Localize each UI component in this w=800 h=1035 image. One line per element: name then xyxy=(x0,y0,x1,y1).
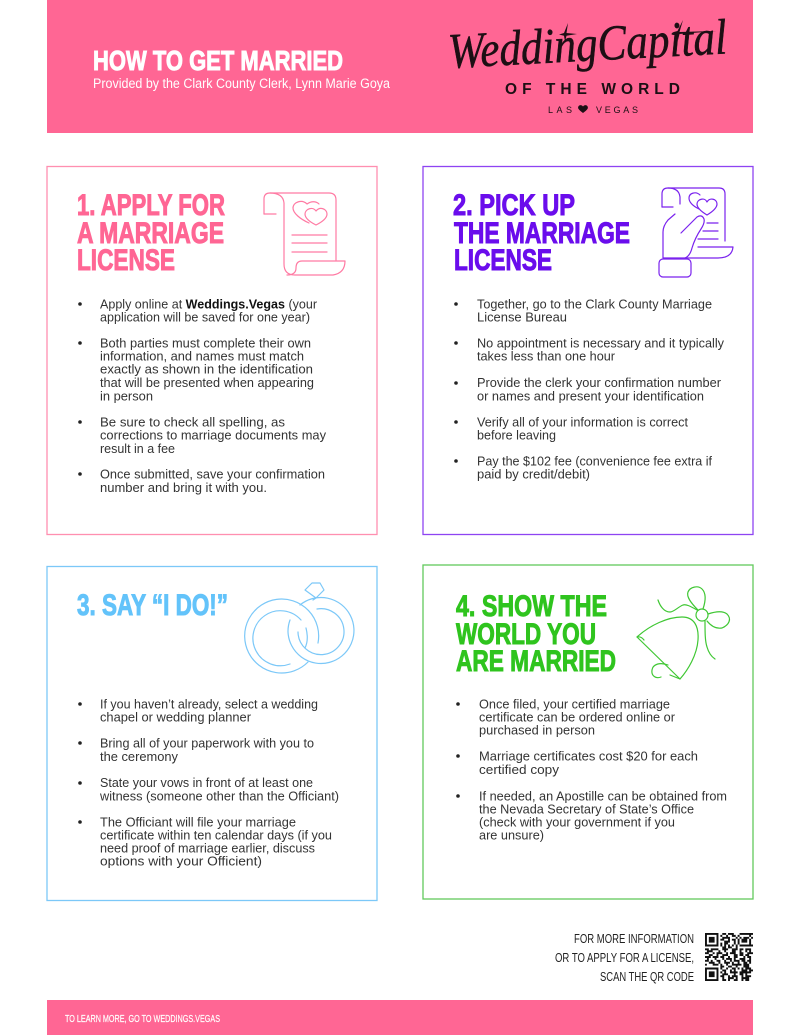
bullet list 4: Once filed, your certified marriage xyxy=(479,696,670,712)
heading 4: ARE MARRIED xyxy=(456,645,616,678)
bullet list 1: that will be presented when appearing xyxy=(100,375,314,390)
bullet list 1: result in a fee xyxy=(100,441,175,456)
bullet list 3: the ceremony xyxy=(100,749,178,764)
bullet list 2: License Bureau xyxy=(477,310,567,324)
bullet list 1: application will be saved for one year) xyxy=(100,310,310,324)
bullet list 1: Once submitted, save your confirmation xyxy=(100,466,325,482)
bullet list 3: options with your Officient) xyxy=(100,854,262,868)
header banner xyxy=(47,0,753,133)
bullet list 2: No appointment is necessary and it typically xyxy=(477,336,724,350)
bullet list 4: are unsure) xyxy=(479,828,544,842)
icon: scroll with hearts xyxy=(264,193,345,275)
heading 1: LICENSE xyxy=(77,244,175,277)
bullet list 1: in person xyxy=(100,388,153,404)
QR call to action text: SCAN THE QR CODE xyxy=(600,969,694,984)
logo: Wedding Capital of the World: WeddingCapital xyxy=(447,8,728,79)
bullet list 2: Pay the $102 fee (convenience fee extra if xyxy=(477,454,712,468)
QR code xyxy=(705,934,753,980)
QR call to action text: OR TO APPLY FOR A LICENSE, xyxy=(555,950,694,965)
bullet list 3: witness (someone other than the Officiant) xyxy=(99,788,339,804)
panel 2: pick up the marriage license xyxy=(423,166,753,534)
bullet list 3: State your vows in front of at least one xyxy=(100,775,313,790)
bullet list 3: Bring all of your paperwork with you to xyxy=(100,736,314,750)
bullet list 4: (check with your government if you xyxy=(479,814,675,830)
heading 4: WORLD YOU xyxy=(456,618,596,651)
logo: Wedding Capital of the World: LAS xyxy=(548,105,572,115)
icon: interlocked rings xyxy=(245,583,354,673)
bullet list 1: information, and names must match xyxy=(100,348,304,364)
bullet list 2: before leaving xyxy=(477,428,556,442)
icon: hand holding license xyxy=(659,188,733,277)
title: HOW TO GET MARRIED xyxy=(93,45,343,76)
heading 1: 1. APPLY FOR xyxy=(77,189,225,222)
heading 1 xyxy=(77,189,225,277)
panel 4: show the world you are married xyxy=(423,565,753,899)
bullet list 2: Together, go to the Clark County Marriage xyxy=(477,296,712,312)
bullet list 4: Marriage certificates cost $20 for each xyxy=(479,748,698,764)
bullet list 1 xyxy=(78,296,326,495)
logo: Wedding Capital of the World xyxy=(447,8,728,115)
heading 2: THE MARRIAGE xyxy=(454,217,630,250)
subtitle: Provided by the Clark County Clerk, Lynn Marie Goya xyxy=(93,76,390,91)
heading 4: 4. SHOW THE xyxy=(456,590,607,623)
heading 2 xyxy=(453,189,630,277)
panel 3: say I do xyxy=(47,566,377,900)
bullet list 3: The Officiant will file your marriage xyxy=(100,814,296,830)
panel 1: apply for a marriage license xyxy=(47,166,377,534)
heading 1: A MARRIAGE xyxy=(77,217,224,250)
QR call to action text: FOR MORE INFORMATION xyxy=(574,931,694,946)
bullet list 4: purchased in person xyxy=(479,722,595,738)
bullet list 1: exactly as shown in the identification xyxy=(100,362,313,376)
footer text: TO LEARN MORE, GO TO WEDDINGS.VEGAS xyxy=(65,1013,220,1025)
heading 2: 2. PICK UP xyxy=(453,189,575,222)
bullet list 2: paid by credit/debit) xyxy=(477,466,590,482)
heading 4 xyxy=(456,590,616,678)
bullet list 1: number and bring it with you. xyxy=(100,480,267,495)
bullet list 1: Apply online at Weddings.Vegas (your xyxy=(100,296,318,312)
bullet list 1: corrections to marriage documents may xyxy=(100,428,326,442)
bullet list 2: Provide the clerk your confirmation number xyxy=(477,375,722,390)
bullet list 3: chapel or wedding planner xyxy=(100,710,252,724)
logo: Wedding Capital of the World: OF THE WORLD xyxy=(505,81,680,98)
bullet list 3: If you haven’t already, select a wedding xyxy=(100,696,318,712)
footer banner xyxy=(47,1000,753,1035)
heading 2: LICENSE xyxy=(454,244,552,277)
bullet list 4: If needed, an Apostille can be obtained from xyxy=(479,788,727,804)
heading 3: 3. SAY “I DO!” xyxy=(77,589,228,622)
bullet list 3: need proof of marriage earlier, discuss xyxy=(100,840,315,856)
bullet list 1: Both parties must complete their own xyxy=(100,336,311,350)
bullet list 3 xyxy=(78,696,339,868)
bullet list 2: takes less than one hour xyxy=(477,348,616,364)
bullet list 3: certificate within ten calendar days (if you xyxy=(100,828,332,842)
bullet list 2 xyxy=(454,296,724,482)
bullet list 4: certified copy xyxy=(479,762,560,777)
icon: bell with bow xyxy=(637,587,729,679)
bullet list 2: Verify all of your information is correct xyxy=(477,414,688,430)
bullet list 4 xyxy=(456,696,727,842)
bullet list 2: or names and present your identification xyxy=(477,388,704,404)
bullet list 4: certificate can be ordered online or xyxy=(479,710,676,724)
QR call to action text xyxy=(555,931,694,984)
bullet list 1: Be sure to check all spelling, as xyxy=(100,414,285,430)
bullet list 4: the Nevada Secretary of State’s Office xyxy=(479,802,694,816)
logo: Wedding Capital of the World: VEGAS xyxy=(596,105,638,115)
